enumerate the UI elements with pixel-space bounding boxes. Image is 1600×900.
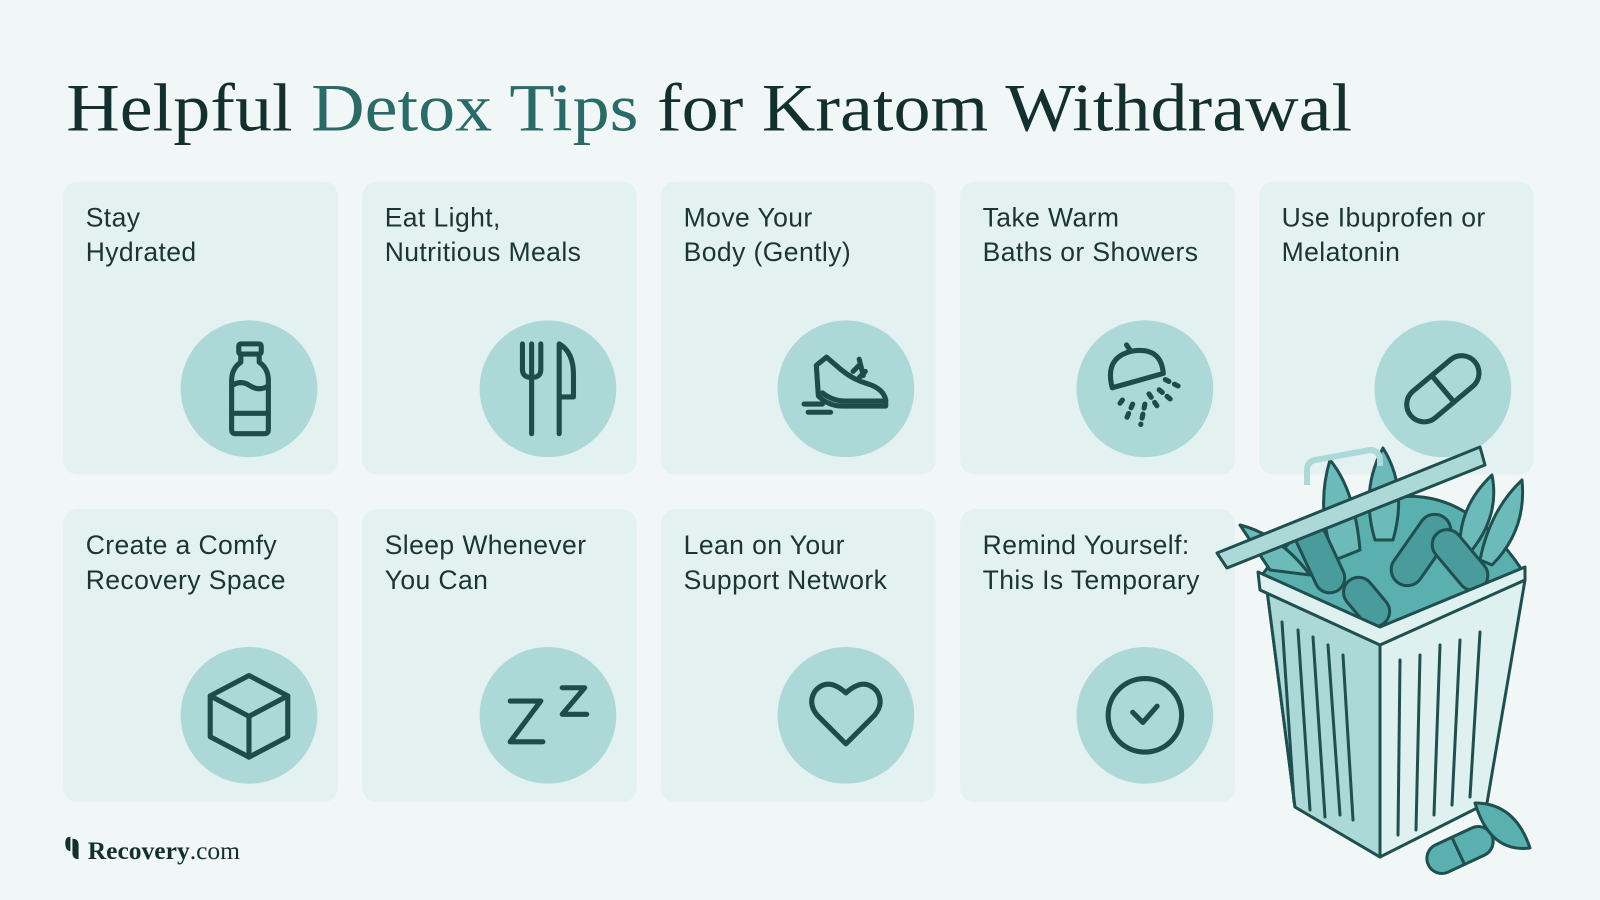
card: warm baths: Take Warm <box>983 203 1119 233</box>
icon: pill <box>1400 349 1486 429</box>
lid <box>1307 450 1380 485</box>
card: ibuprofen <box>1259 182 1534 474</box>
card: eat light <box>362 182 637 474</box>
card: sleep: You Can <box>385 565 488 595</box>
card: comfy space: Create a Comfy <box>86 530 277 560</box>
contents <box>1262 496 1522 640</box>
card: support network: Support Network <box>684 565 888 595</box>
card: move your body: Move Your <box>684 203 813 233</box>
card: warm baths <box>960 182 1235 474</box>
icon: fork and knife <box>522 344 573 434</box>
card: temporary <box>960 509 1235 802</box>
card: support network <box>661 509 936 802</box>
illustration: trash can with kratom <box>1217 447 1530 878</box>
card: eat light: Eat Light, <box>385 203 501 233</box>
card: comfy space: Recovery Space <box>86 565 286 595</box>
card: ibuprofen: Use Ibuprofen or <box>1282 203 1486 233</box>
icon: shower <box>1110 345 1182 424</box>
card: temporary: Remind Yourself: <box>983 530 1190 560</box>
card: ibuprofen: Melatonin <box>1282 237 1400 267</box>
card: sleep <box>362 509 637 802</box>
card: sleep: Sleep Whenever <box>385 530 586 560</box>
card: comfy space <box>63 509 338 802</box>
card: stay hydrated: Hydrated <box>86 237 197 267</box>
body <box>1267 580 1525 857</box>
icon: clock <box>1108 679 1182 752</box>
card: warm baths: Baths or Showers <box>983 237 1198 267</box>
icon: heart <box>812 684 880 744</box>
card: move your body: Body (Gently) <box>684 237 851 267</box>
card: temporary: This Is Temporary <box>983 565 1200 595</box>
icon: shoe <box>804 357 886 412</box>
card: stay hydrated <box>63 182 338 474</box>
icon: zz <box>510 688 587 742</box>
fallen pill and leaf <box>1422 822 1498 878</box>
icon: cube <box>210 676 288 757</box>
card: support network: Lean on Your <box>684 530 845 560</box>
title: Helpful Detox Tips for Kratom Withdrawal <box>66 71 1352 146</box>
card: eat light: Nutritious Meals <box>385 237 581 267</box>
icon: bottle <box>232 344 268 434</box>
logo: Recovery.com <box>88 836 240 865</box>
card: move your body <box>661 182 936 474</box>
card: stay hydrated: Stay <box>86 203 141 233</box>
